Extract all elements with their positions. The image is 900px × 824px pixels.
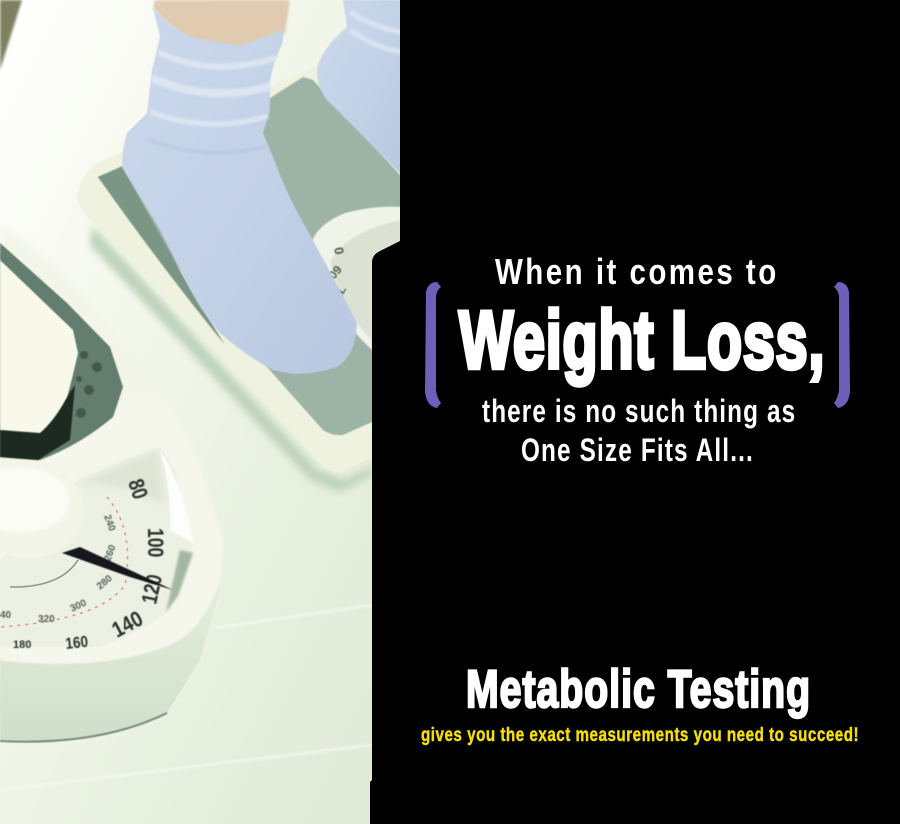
dial scale arcs [0, 497, 128, 627]
dial needle [62, 547, 173, 590]
right purple bracket [834, 282, 850, 408]
scale dial [0, 447, 193, 647]
dial knob [0, 462, 84, 558]
dial numbers: 80 [123, 476, 152, 502]
back scale: 1L [332, 284, 349, 302]
lower body [0, 575, 221, 741]
front scale body: 40 [0, 610, 12, 621]
upper rim [0, 392, 222, 664]
back scale: 09 [326, 262, 345, 282]
back scale [77, 60, 402, 472]
outer shell [0, 225, 222, 740]
heading: when it comes to: When it comes to [495, 251, 776, 292]
skin at ankle [153, 0, 290, 48]
dial numbers: 160 [65, 634, 89, 653]
left leg top [0, 0, 22, 70]
left purple bracket [425, 282, 441, 408]
back sock [317, 0, 402, 175]
front scale body: 280 [95, 573, 115, 592]
back scale dial [310, 207, 402, 350]
platform [98, 77, 402, 435]
dial numbers: 140 [108, 607, 147, 643]
panel: black text area [370, 0, 900, 824]
control recess [0, 243, 123, 460]
front scale body: 300 [69, 598, 89, 615]
heading: metabolic testing: Metabolic Testing [466, 659, 810, 718]
front scale body: 240 [101, 513, 117, 533]
tagline: yellow: gives you the exact measurements you need to succeed! [421, 723, 859, 745]
buttons [76, 351, 102, 418]
dial window reflection [160, 450, 193, 543]
dial numbers: 100 [142, 528, 167, 557]
panel: photo of feet on bathroom scales [0, 0, 402, 824]
photo floor [0, 0, 402, 824]
front scale body: 320 [38, 614, 55, 625]
subheading: no such thing: there is no such thing as [482, 394, 795, 430]
back scale shadow on floor [90, 225, 372, 492]
dial numbers: 120 [138, 572, 168, 606]
subheading: one size fits all: One Size Fits All... [521, 433, 753, 469]
front scale body [0, 225, 222, 742]
dial numbers [13, 476, 168, 653]
foot sock [0, 260, 78, 433]
rim [77, 60, 402, 472]
heading: weight loss: Weight Loss, [459, 294, 824, 385]
dial numbers: 180 [13, 639, 31, 651]
back scale: 0 [331, 246, 347, 256]
front scale body: 260 [102, 543, 119, 563]
front sock [122, 7, 357, 374]
